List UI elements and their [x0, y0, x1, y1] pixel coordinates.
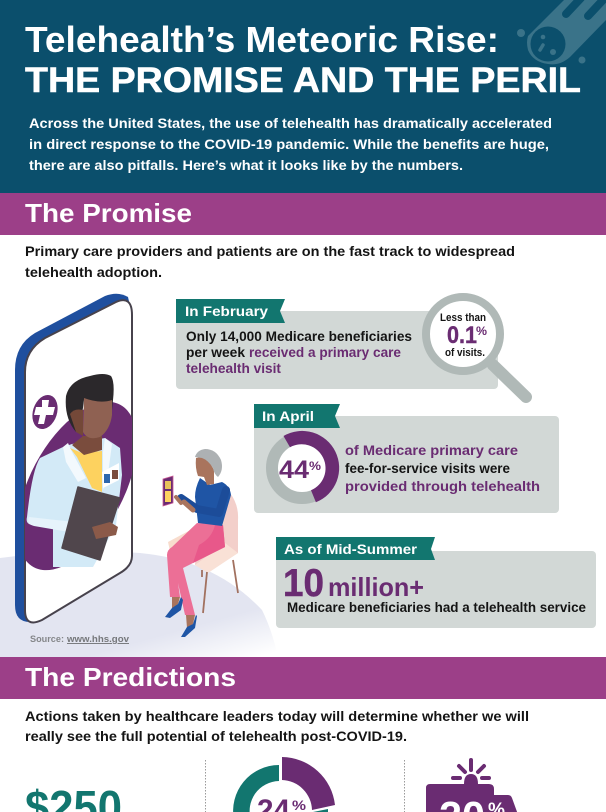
predictions intro text [25, 708, 529, 744]
ground shape [0, 551, 278, 657]
title line 1: Telehealth’s Meteoric Rise: [25, 19, 499, 60]
label: In February: In February [185, 303, 268, 319]
title line 2: THE PROMISE AND THE PERIL [25, 61, 581, 100]
doctor [25, 402, 132, 570]
icon: magnifying glass: Less than [440, 312, 486, 324]
predictions intro text: Actions taken by healthcare leaders today will determine whether we will [25, 708, 529, 724]
intro text [29, 115, 552, 173]
predictions intro text: really see the full potential of telehealth post-COVID-19. [25, 728, 407, 744]
heading band: The Promise [0, 193, 606, 235]
label: In February [176, 299, 285, 323]
April text: of Medicare primary care [345, 442, 518, 458]
panel: As of Mid-Summer [276, 537, 596, 628]
label: As of Mid-Summer: As of Mid-Summer [284, 541, 418, 557]
intro text: there are also pitfalls. Here’s what it looks like by the numbers. [29, 157, 463, 173]
February text [186, 328, 412, 376]
donut chart: 24% [233, 757, 335, 812]
Mid-Summer text: Medicare beneficiaries had a telehealth service [287, 599, 586, 615]
heading band: The Promise: The Promise [25, 198, 192, 228]
promise intro text [25, 243, 515, 280]
source note: Source: [30, 634, 64, 645]
icon: magnifying glass [426, 297, 526, 397]
label: In April [254, 404, 340, 428]
label: As of Mid-Summer [276, 537, 435, 560]
April text: provided through telehealth [345, 478, 540, 494]
icon: meteor [517, 0, 606, 64]
illustration: patient on chair [163, 449, 238, 637]
icon: magnifying glass: % [476, 324, 487, 338]
chair [168, 493, 238, 613]
panel: In April [254, 404, 559, 513]
heading band: The Predictions [0, 657, 606, 699]
icon: magnifying glass: 0.1 [447, 322, 477, 349]
label: In April: In April [262, 408, 314, 424]
February text: per week [186, 344, 245, 360]
April text: fee-for-service visits were [345, 460, 510, 476]
stat: 10 million+ [283, 562, 424, 605]
phone body [15, 294, 132, 622]
illustration: phone with doctor [15, 294, 133, 624]
donut chart: 44% [272, 431, 339, 502]
February text: received a primary care [249, 344, 401, 360]
April text [345, 442, 540, 494]
stat: 10 million+: 10 [283, 562, 324, 605]
promise intro text: telehealth adoption. [25, 264, 162, 280]
patient figure [163, 449, 231, 637]
icon: bag with 20% [426, 760, 520, 812]
February text: telehealth visit [186, 360, 281, 376]
icon: medical cross [28, 392, 62, 432]
icon: magnifying glass: of visits. [445, 347, 485, 359]
doctor head [66, 374, 114, 438]
donut chart: 44%: 44 [279, 456, 309, 484]
intro text: Across the United States, the use of telehealth has dramatically accelerated [29, 115, 552, 131]
promise intro text: Primary care providers and patients are on the fast track to widespread [25, 243, 515, 259]
February text: Only 14,000 Medicare beneficiaries [186, 328, 412, 344]
stat: 10 million+: million+ [328, 572, 424, 602]
heading band: The Predictions: The Predictions [25, 662, 236, 692]
panel: In February [176, 297, 526, 397]
source note [30, 634, 130, 645]
source note: www.hhs.gov [66, 634, 130, 645]
intro text: in direct response to the COVID-19 pandemic. While the benefits are huge, [29, 136, 549, 152]
panel: header [0, 0, 606, 193]
donut chart: 44%: % [309, 459, 321, 473]
